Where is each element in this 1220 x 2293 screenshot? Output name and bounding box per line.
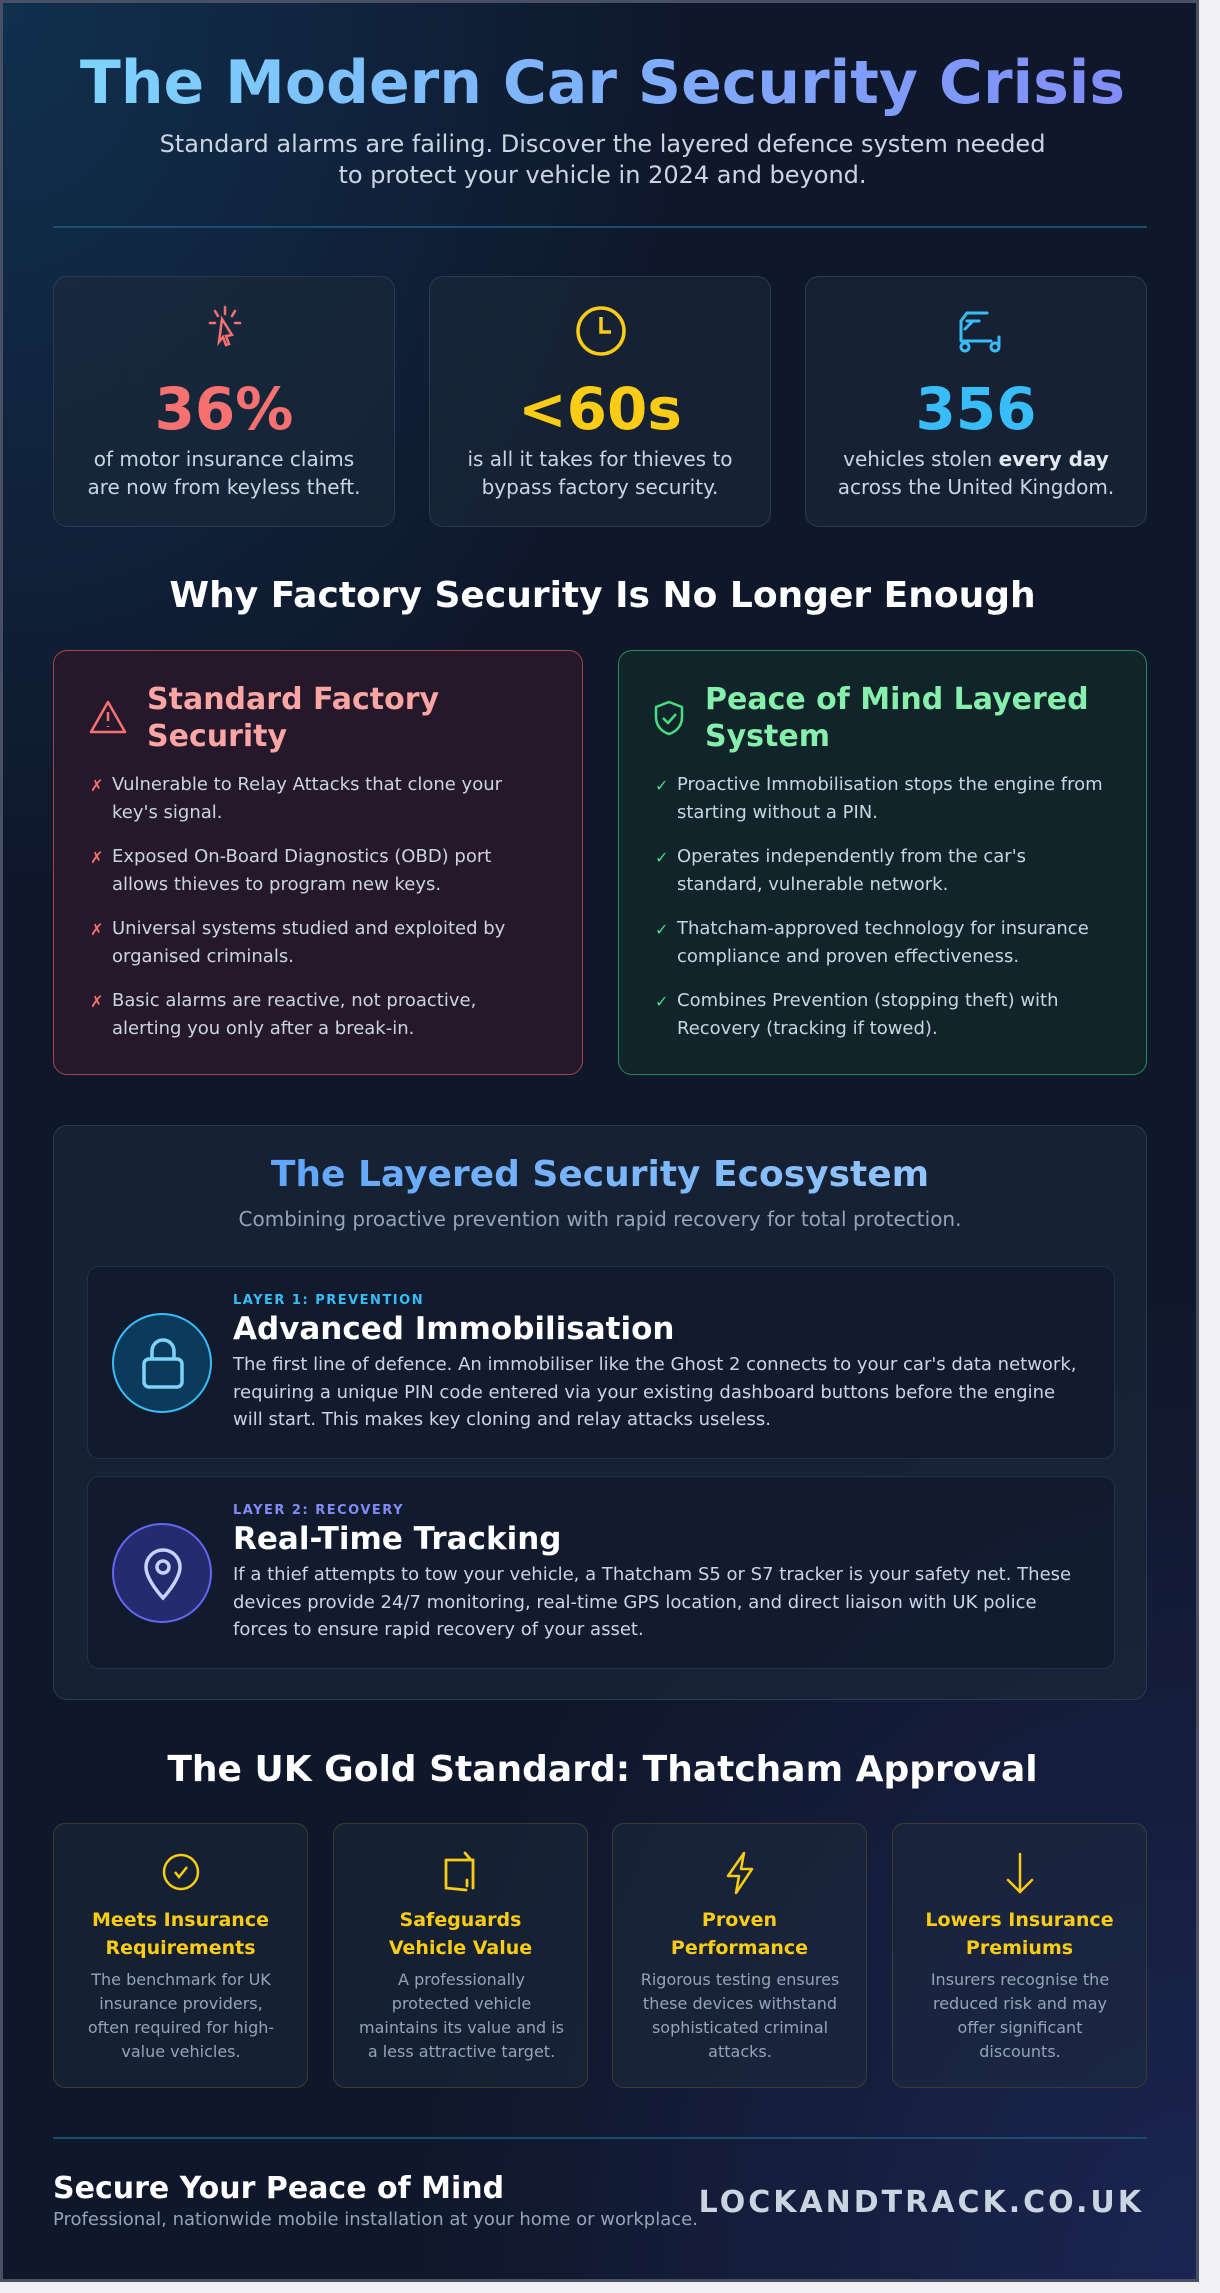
icon: lightning	[726, 1852, 754, 1894]
card: lowers premiums: Premiums	[966, 1937, 1073, 1959]
list: Proactive Immobilisation stops the engine from starting without a PIN.	[677, 774, 1103, 823]
footer: call to action: Secure Your Peace of Mind	[53, 2171, 504, 2206]
list: Vulnerable to Relay Attacks that clone your key's signal.	[112, 774, 502, 823]
icon: value	[444, 1852, 474, 1892]
layer 1 card: The first line of defence. An immobiliser like the Ghost 2 connects to your car's data network, requiring a unique PIN code entered via your existing dashboard buttons before the engine will start. This makes key cloning and relay attacks useless.	[233, 1354, 1076, 1430]
card: vehicle value: Vehicle Value	[389, 1937, 532, 1959]
stat card: 356: vehicles stolen every day	[843, 447, 1109, 471]
card: vehicle value: maintains its value and is	[359, 2018, 564, 2037]
title: The Modern Car Security Crisis	[80, 48, 1125, 118]
subtitle: to protect your vehicle in 2024 and beyond.	[338, 161, 867, 189]
footer: call to action	[53, 2171, 698, 2230]
panel: layered system: ✓	[655, 920, 668, 939]
footer: call to action: Professional, nationwide mobile installation at your home or workplace.	[53, 2209, 698, 2230]
stat card: 36%: 36%	[155, 375, 293, 443]
card: vehicle value	[333, 1823, 588, 2088]
panel: standard factory security: Basic alarms are reactive, not proactive, alerting you only after a break-in.	[112, 990, 476, 1039]
stat card: 356: across the United Kingdom.	[838, 475, 1114, 499]
card: lowers premiums: Lowers Insurance	[925, 1909, 1114, 1931]
layer 2 card: If a thief attempts to tow your vehicle, a Thatcham S5 or S7 tracker is your safety net. These devices provide 24/7 monitoring, real-time GPS location, and direct liaison with UK police forces to ensure rapid recovery of your asset.	[233, 1564, 1071, 1640]
icon: map pin	[112, 1523, 212, 1623]
icon: shield	[654, 700, 684, 736]
card: insurance requirements	[53, 1823, 308, 2088]
panel: standard factory security: Exposed On-Board Diagnostics (OBD) port allows thieves to program new keys.	[112, 846, 491, 895]
stat card: <60s	[429, 276, 771, 527]
card: vehicle value: protected vehicle	[392, 1994, 531, 2013]
icon: clock	[576, 306, 626, 356]
panel: standard factory security: ✗	[90, 848, 103, 867]
heading: Peace of Mind Layered	[705, 682, 1089, 717]
stat card: <60s: is all it takes for thieves to	[467, 447, 733, 471]
panel: layered system: Thatcham-approved technology for insurance compliance and proven effectiveness.	[677, 918, 1089, 967]
subtitle: Standard alarms are failing. Discover the layered defence system needed	[160, 130, 1045, 158]
stat card: 36%	[53, 276, 395, 527]
panel: standard factory security: ✗	[90, 920, 103, 939]
layer 1 card: Advanced Immobilisation	[233, 1311, 674, 1347]
heading: System	[705, 719, 830, 754]
panel: standard factory security	[53, 650, 583, 1075]
card: proven performance: Performance	[671, 1937, 808, 1959]
panel: standard factory security: ✗	[90, 992, 103, 1011]
card: vehicle value: a less attractive target.	[368, 2042, 555, 2061]
panel: layered system: ✓	[655, 848, 668, 867]
icon: lock	[112, 1313, 212, 1413]
heading: The Layered Security Ecosystem	[271, 1154, 929, 1195]
stat card: 356	[805, 276, 1147, 527]
heading: Standard Factory	[147, 682, 439, 717]
card: proven performance	[612, 1823, 867, 2088]
icon: cursor click	[208, 306, 242, 347]
icon: warning	[90, 700, 126, 734]
card: vehicle value: Safeguards	[400, 1909, 521, 1931]
layer 2 card: Real-Time Tracking	[233, 1521, 561, 1557]
stat card: 36%: of motor insurance claims	[94, 447, 354, 471]
card: insurance requirements: The benchmark for UK insurance providers, often required for high-value vehicles.	[88, 1970, 274, 2061]
card: lowers premiums: Insurers recognise the reduced risk and may offer significant discounts.	[931, 1970, 1109, 2061]
subtitle: Combining proactive prevention with rapid recovery for total protection.	[239, 1207, 961, 1231]
card: vehicle value: A professionally	[398, 1970, 525, 1989]
panel: layered system: ✓	[655, 776, 668, 795]
card: insurance requirements: Requirements	[105, 1937, 256, 1959]
icon: arrow down	[1006, 1852, 1034, 1894]
panel: layered system	[618, 650, 1147, 1075]
layer 1 card: LAYER 1: PREVENTION	[233, 1293, 424, 1308]
card: proven performance: Rigorous testing ensures these devices withstand sophisticated criminal attacks.	[641, 1970, 839, 2061]
card: insurance requirements: Meets Insurance	[92, 1909, 269, 1931]
stat card: <60s: bypass factory security.	[482, 475, 718, 499]
footer: website: LOCKANDTRACK.CO.UK	[699, 2185, 1144, 2220]
subtitle	[160, 130, 1045, 189]
heading: Security	[147, 719, 287, 754]
layer 2 card: LAYER 2: RECOVERY	[233, 1503, 404, 1518]
stat card: 36%: are now from keyless theft.	[87, 475, 360, 499]
card: proven performance: Proven	[702, 1909, 777, 1931]
panel: layered system: Operates independently from the car's standard, vulnerable network.	[677, 846, 1026, 895]
icon: tow truck	[960, 311, 1000, 352]
panel: layered security ecosystem	[53, 1125, 1147, 1700]
icon: check circle	[162, 1854, 200, 1890]
card: lowers premiums	[892, 1823, 1147, 2088]
stat card: <60s: <60s	[518, 375, 682, 443]
heading: thatcham: The UK Gold Standard: Thatcham Approval	[167, 1749, 1038, 1790]
panel: layered system: Combines Prevention (stopping theft) with Recovery (tracking if towed).	[677, 990, 1059, 1039]
panel: standard factory security: Universal systems studied and exploited by organised criminals.	[112, 918, 505, 967]
heading	[147, 682, 439, 754]
panel: layered system: ✓	[655, 992, 668, 1011]
heading: why factory security: Why Factory Security Is No Longer Enough	[169, 575, 1036, 616]
panel: standard factory security: ✗	[90, 776, 103, 795]
heading	[705, 682, 1089, 754]
stat card: 356: 356	[915, 375, 1037, 443]
layer 2 card	[87, 1476, 1115, 1669]
layer 1 card	[87, 1266, 1115, 1459]
